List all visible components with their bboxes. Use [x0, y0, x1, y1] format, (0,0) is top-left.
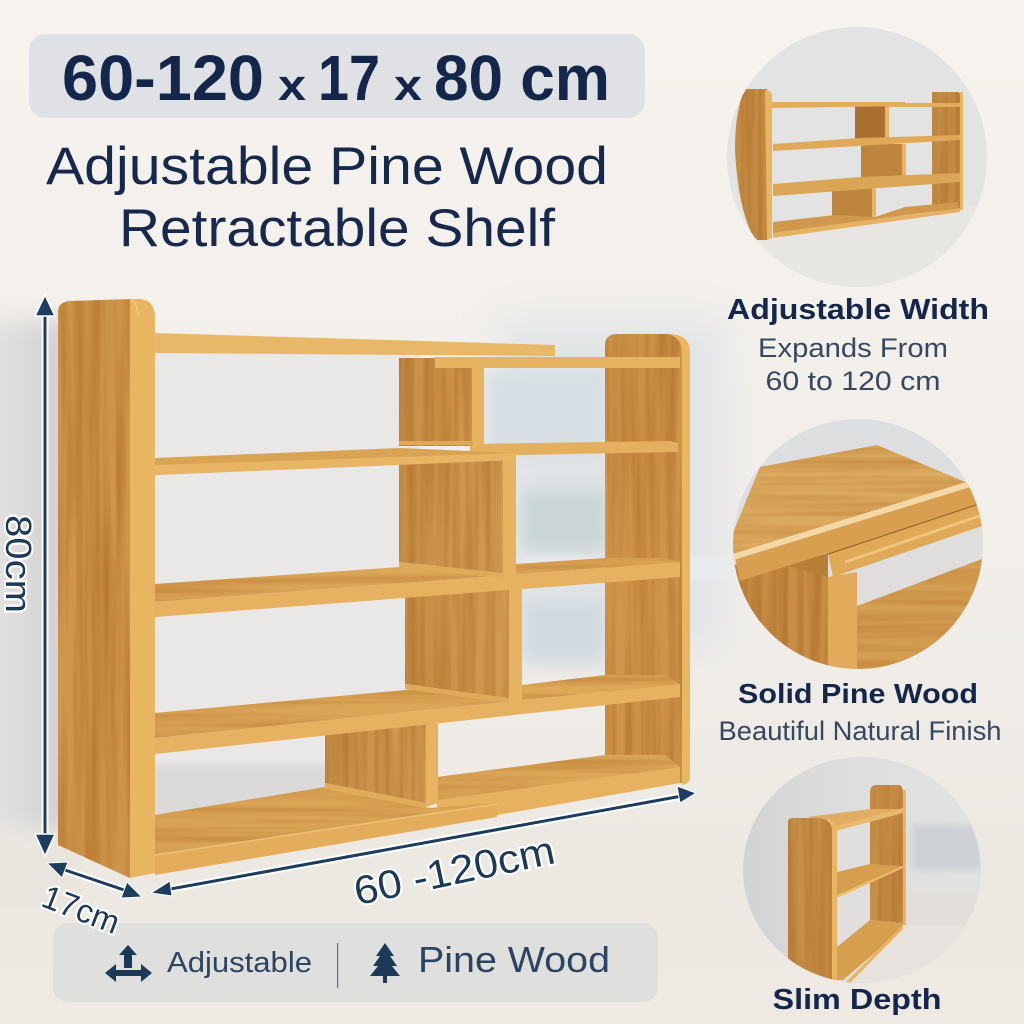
text: expands: [758, 333, 948, 396]
shelf 5 left part: [155, 787, 497, 875]
shelf 1 left: [155, 333, 555, 356]
dimensions title pill: 60-120: [62, 42, 264, 114]
box C: [399, 460, 516, 578]
icon: adjustable arrows: [105, 945, 152, 982]
title: Adjustable Pine Wood: [46, 137, 608, 196]
panel: slim depth: [740, 750, 990, 1016]
box A: [325, 722, 438, 808]
detail photo: side view: [743, 757, 981, 983]
arrow: width 60-120cm: [151, 786, 696, 896]
icon: pine tree: [370, 943, 400, 983]
label: 60-120cm: 60 -120cm: [350, 829, 559, 914]
panel: solid pine wood: [718, 410, 1002, 746]
heading: adjustable width: Adjustable Width: [727, 294, 989, 326]
back right panel: [605, 334, 690, 785]
title: Retractable Shelf: [119, 199, 555, 258]
feature strip: [53, 923, 658, 1002]
text: expands: Expands From: [758, 333, 948, 363]
heading: solid pine wood: Solid Pine Wood: [738, 678, 978, 709]
title: [46, 137, 608, 258]
box D: [399, 358, 484, 447]
detail photo: extended shelf: [727, 27, 987, 287]
dimensions title pill: x: [278, 61, 307, 110]
dimensions title pill: 17: [318, 42, 380, 114]
shelf 2 right: [470, 441, 678, 456]
detail photo: wood joint: [733, 419, 983, 669]
panel: adjustable width: [727, 27, 987, 390]
label: 17cm: 17cm: [37, 878, 125, 941]
dimensions title pill: 80 cm: [434, 42, 610, 114]
shelf 4: [155, 675, 680, 754]
dimensions title pill: x: [394, 61, 423, 110]
label: pine wood: Pine Wood: [418, 939, 610, 980]
box B: [405, 586, 522, 703]
shelf 2 left: [155, 448, 516, 475]
arrow: depth 17cm: [47, 862, 142, 898]
text: natural finish: Beautiful Natural Finish: [718, 716, 1002, 746]
text: expands: 60 to 120 cm: [766, 366, 940, 396]
shelf 3: [155, 558, 680, 617]
dimensions title pill: [29, 34, 645, 118]
heading: slim depth: Slim Depth: [772, 984, 942, 1016]
label: adjustable: Adjustable: [167, 947, 312, 979]
main shelf: [58, 299, 690, 878]
shelf 5 right part: [437, 755, 680, 815]
arrow: height 80cm: [35, 295, 55, 856]
shelf 1 right: [435, 357, 680, 368]
front left panel: [58, 299, 155, 878]
